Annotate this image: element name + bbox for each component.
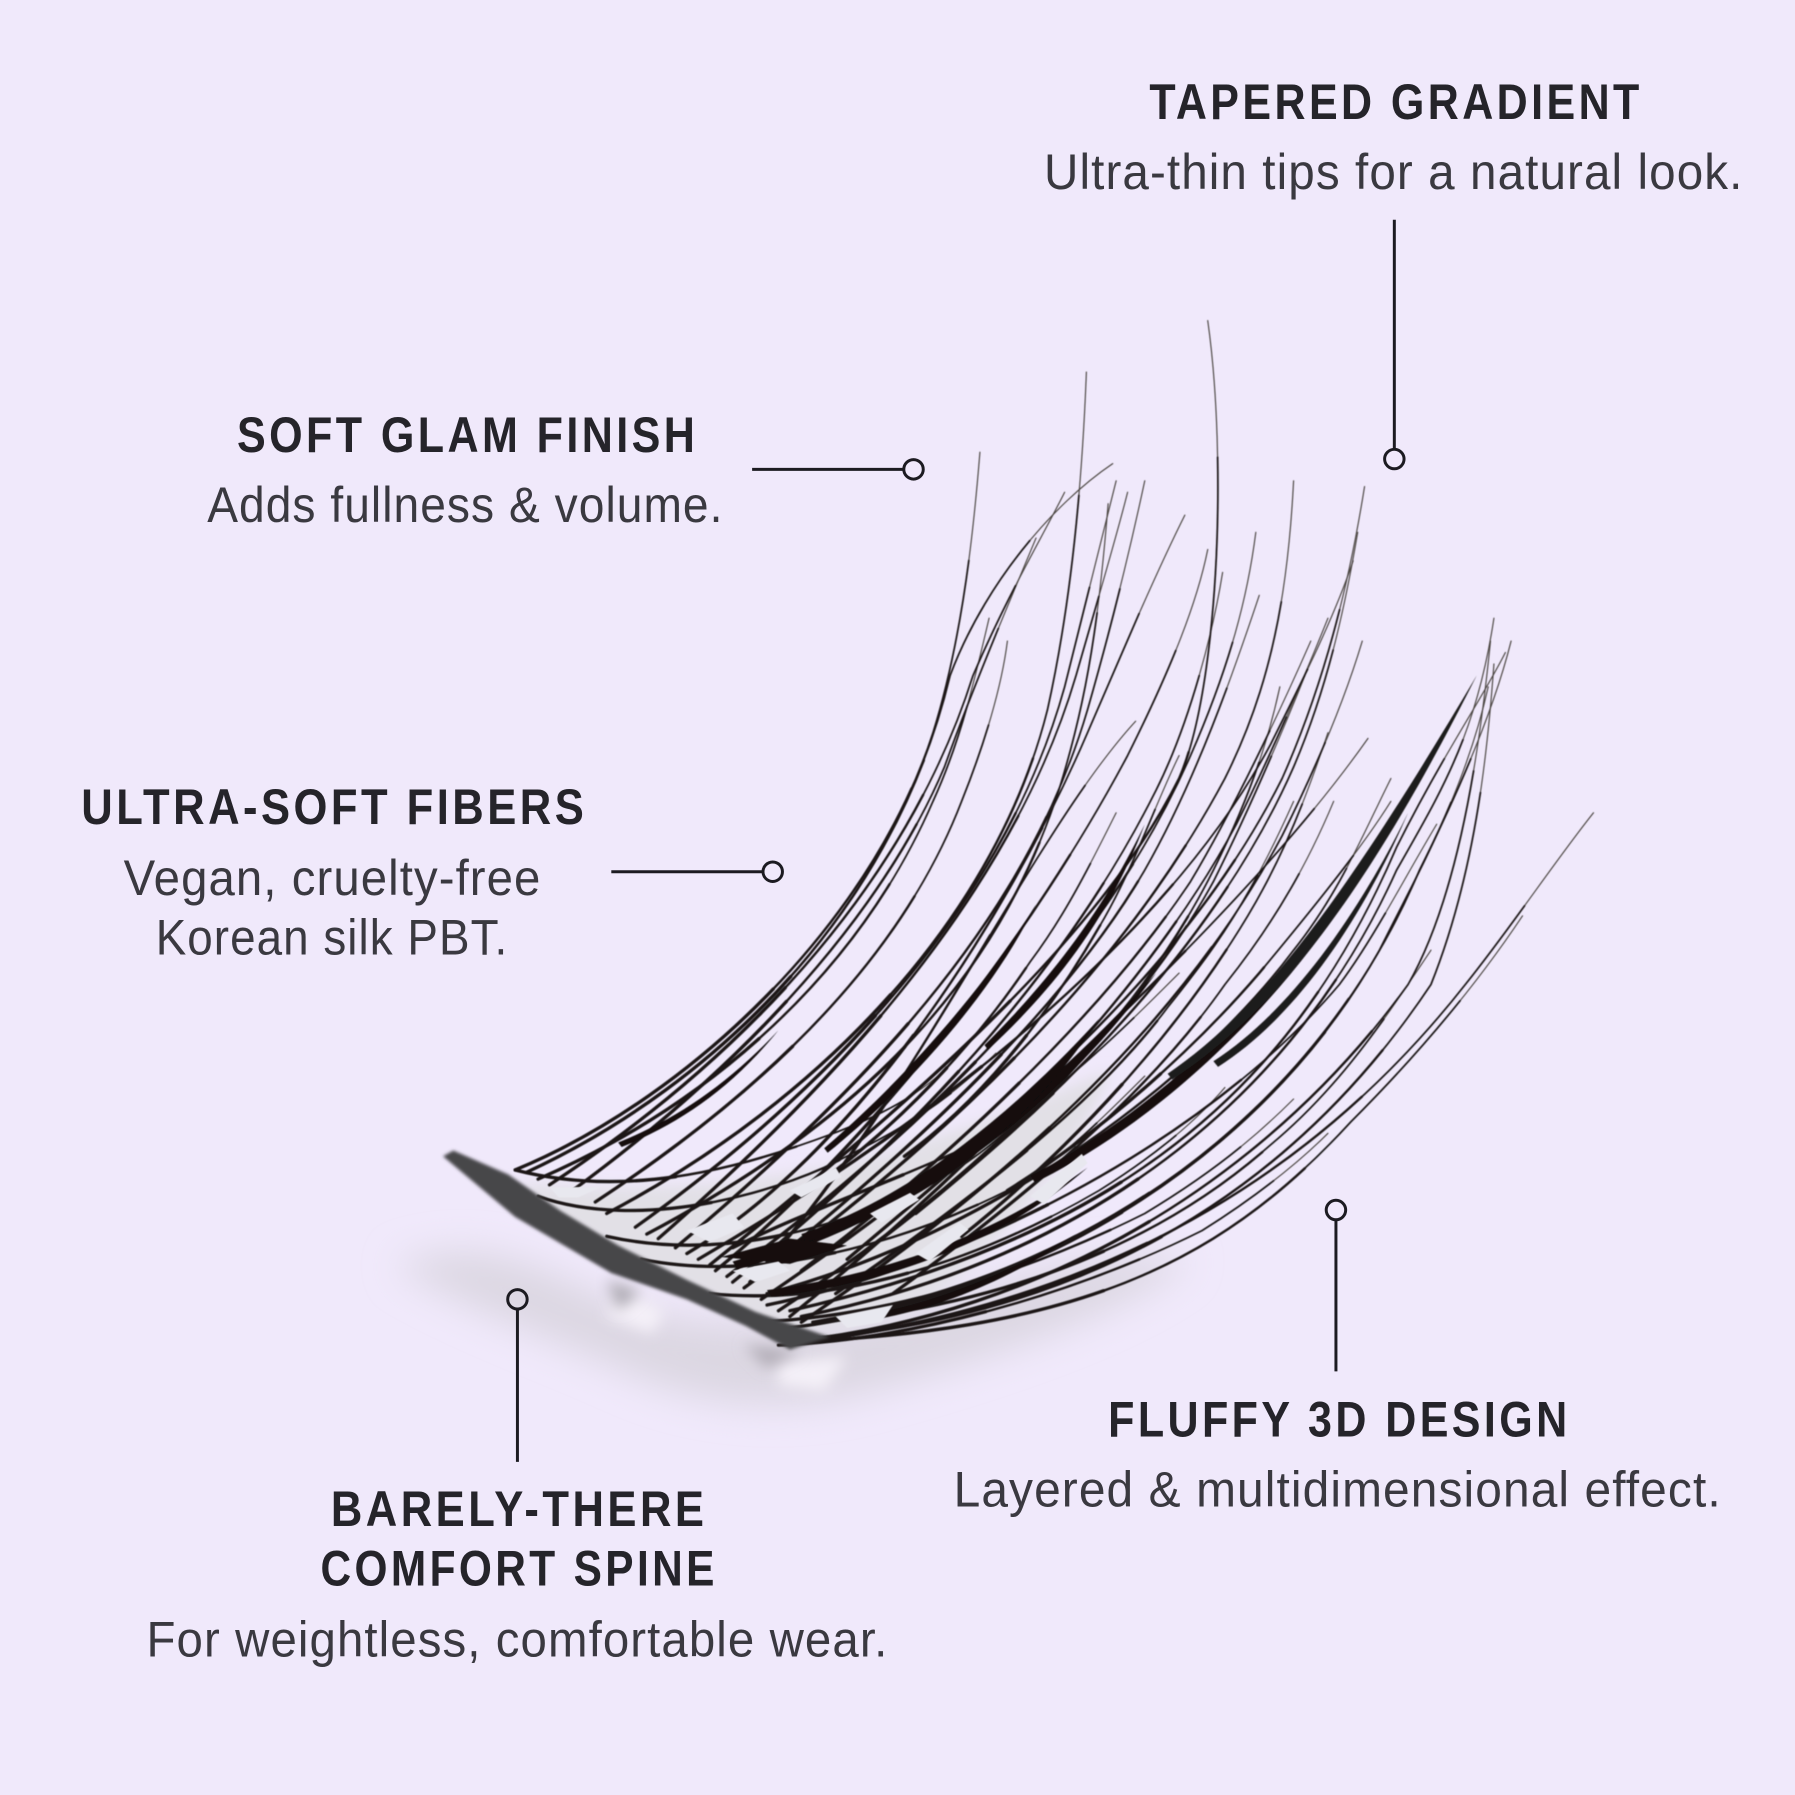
description: Adds fullness & volume. [207,476,723,533]
dense dark mass [618,675,1477,1322]
description: Layered & multidimensional effect. [954,1461,1722,1518]
cast shadow [395,1252,1191,1404]
description: For weightless, comfortable wear. [147,1610,888,1667]
leader line [611,862,782,881]
callout: fluffy 3d design [954,1200,1722,1518]
leader line [1326,1200,1346,1371]
lash strands [515,321,1594,1345]
description: Vegan, cruelty-free [124,849,541,906]
leader line [752,460,923,479]
heading: FLUFFY 3D DESIGN [1108,1391,1571,1448]
lash photo [395,321,1594,1404]
callout: tapered gradient [1044,73,1743,469]
spine highlights [549,1154,1088,1328]
description [124,849,541,966]
heading: COMFORT SPINE [321,1540,718,1597]
heading: TAPERED GRADIENT [1149,73,1643,130]
leader line [1385,220,1404,469]
pale glue gaps near base [515,1070,1110,1329]
spine [443,1150,830,1350]
description: Ultra-thin tips for a natural look. [1044,143,1743,200]
leader line [508,1290,527,1462]
description: Korean silk PBT. [156,909,508,966]
callout: barely-there comfort spine [147,1290,888,1667]
callout: soft glam finish [207,406,923,533]
callout: ultra-soft fibers [81,778,782,966]
heading [321,1480,718,1597]
heading: SOFT GLAM FINISH [237,406,698,463]
heading: BARELY-THERE [331,1480,707,1537]
heading: ULTRA-SOFT FIBERS [81,778,587,835]
